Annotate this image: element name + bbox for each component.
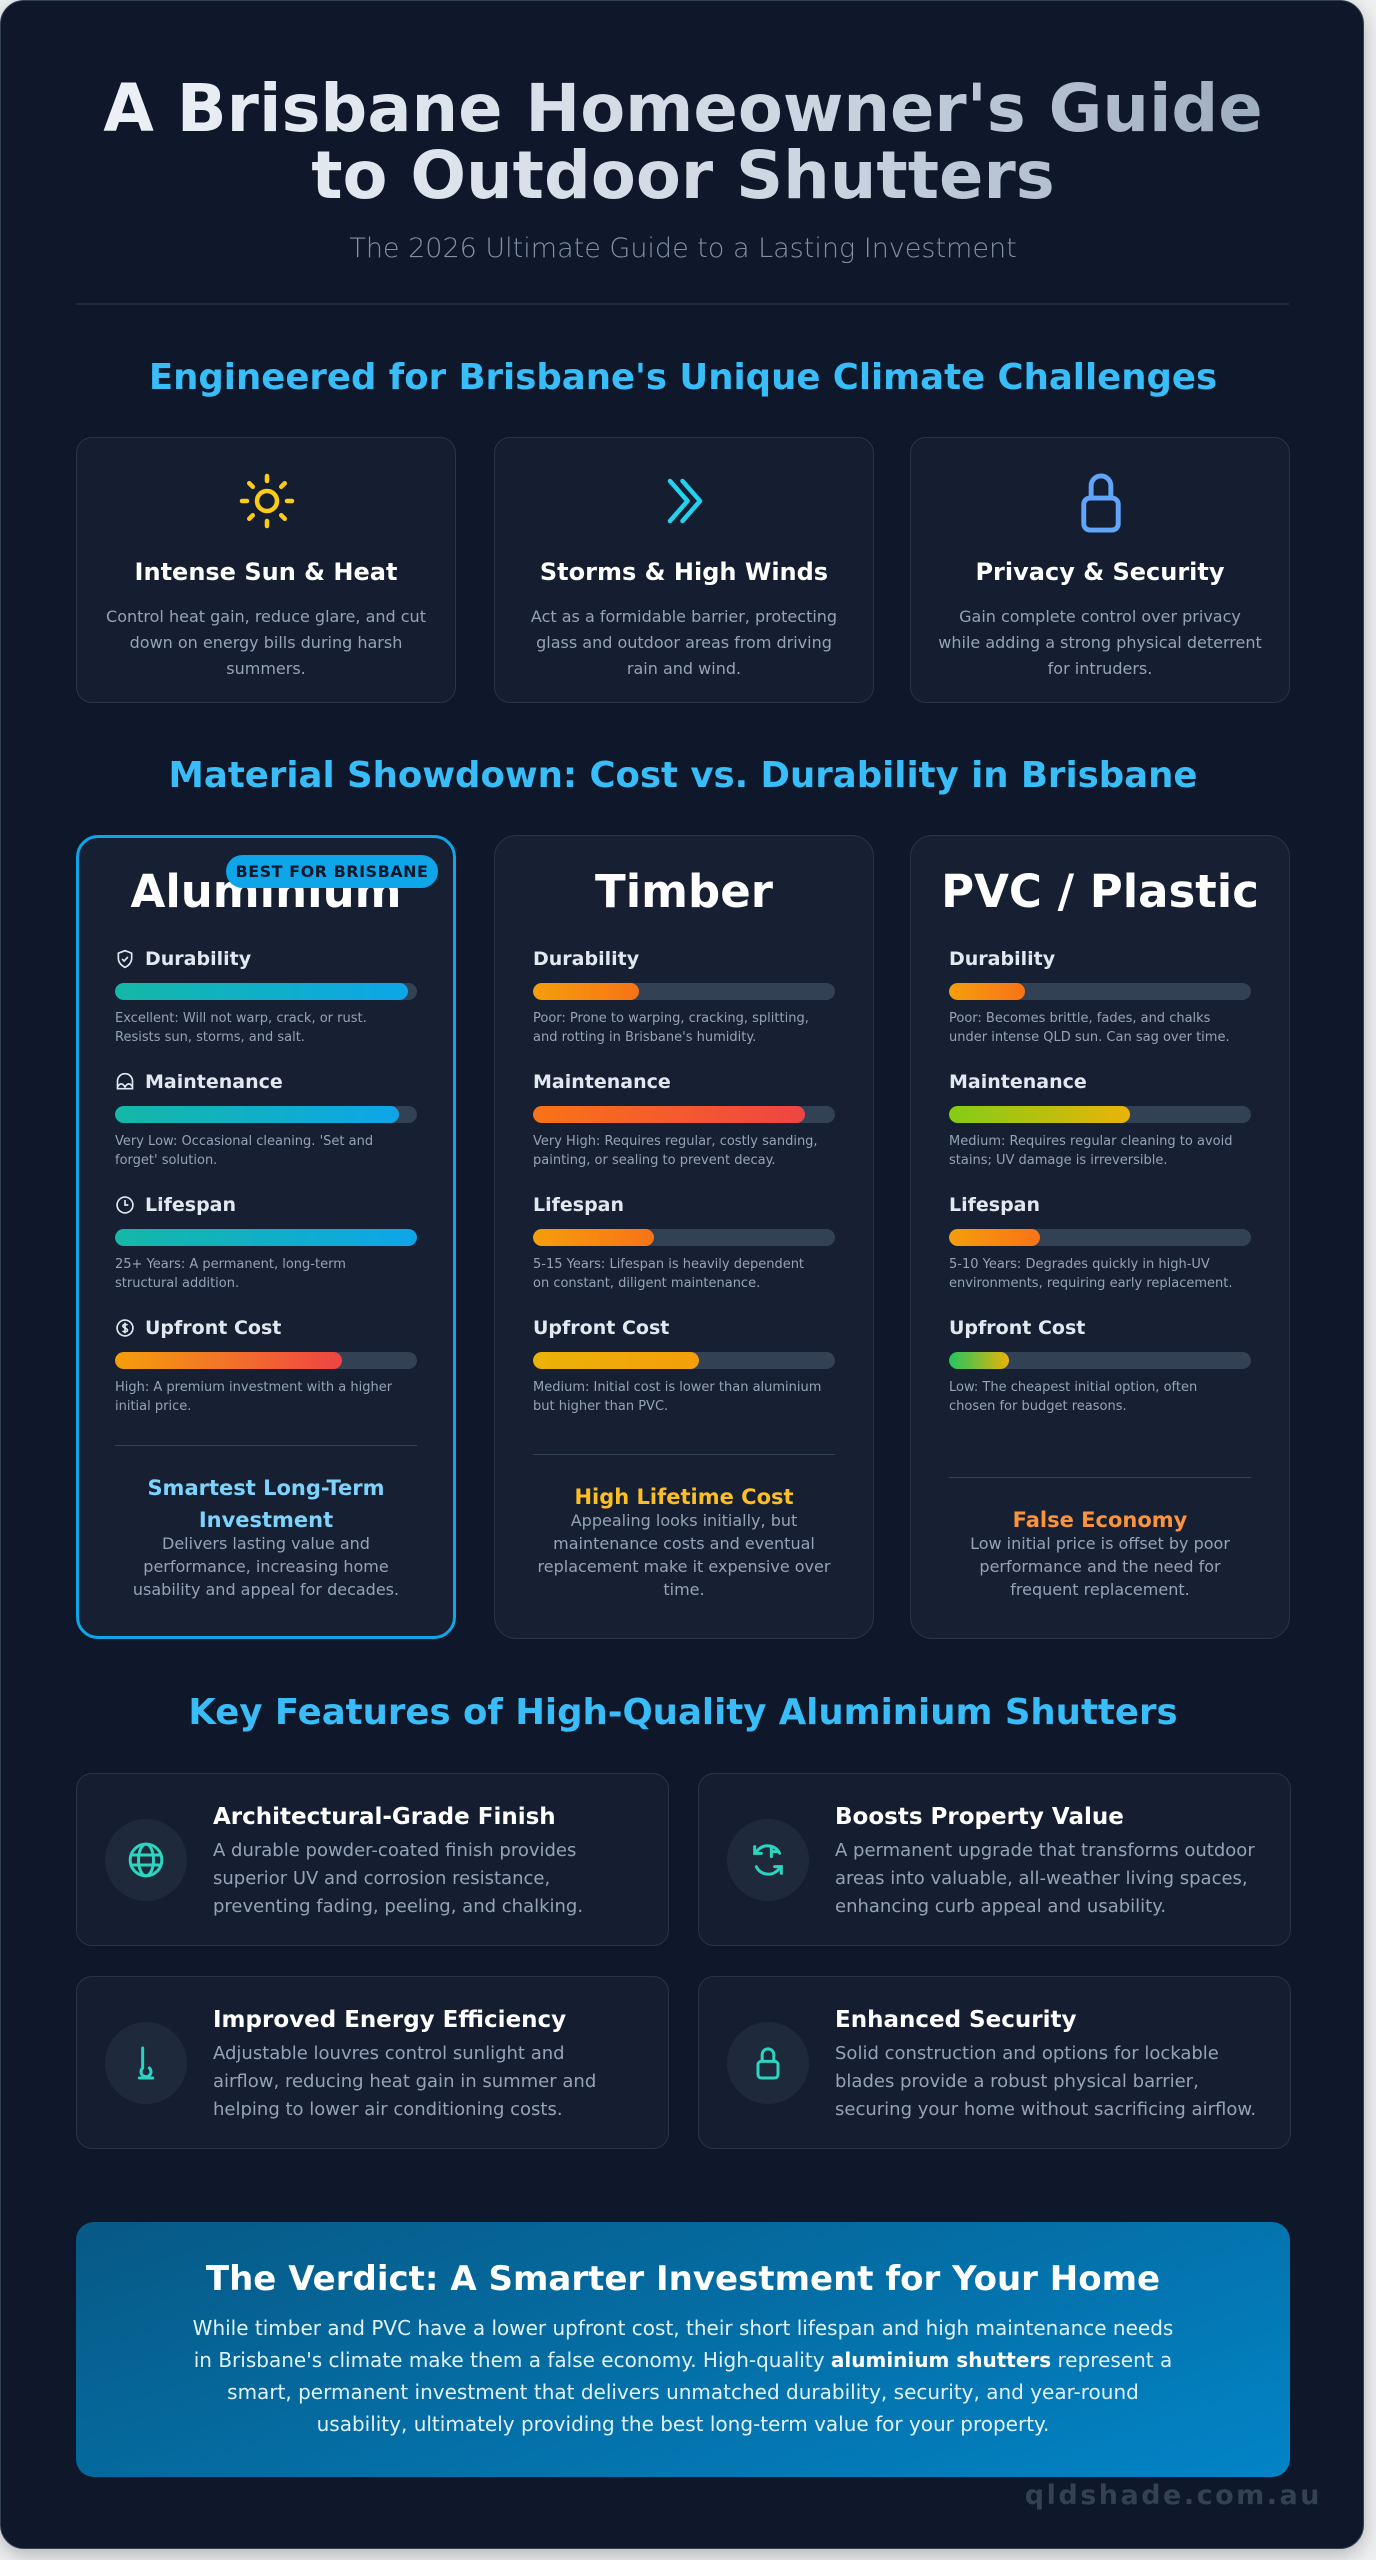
icon: lock	[1081, 474, 1121, 532]
feature: property value	[698, 1773, 1291, 1946]
metric: lifespan: environments, requiring early replacement.	[949, 1276, 1232, 1291]
panel: storms: Act as a formidable barrier, protecting	[531, 607, 837, 626]
verdict: timber: maintenance costs and eventual	[553, 1534, 815, 1553]
metric: durability	[949, 948, 1251, 1045]
metric: maintenance: forget' solution.	[115, 1153, 217, 1168]
subtitle: The 2026 Ultimate Guide to a Lasting Investment	[349, 233, 1017, 264]
panel: sun & heat: summers.	[226, 659, 306, 678]
feature: energy efficiency: Improved Energy Efficiency	[213, 2007, 566, 2033]
panel: sun & heat: down on energy bills during harsh	[130, 633, 402, 652]
feature: security: Enhanced Security	[835, 2007, 1076, 2033]
metric: upfront cost: Upfront Cost	[533, 1317, 669, 1339]
panel: storms: Storms & High Winds	[540, 558, 828, 586]
icon: refresh	[727, 1819, 809, 1901]
metric: maintenance	[533, 1071, 835, 1168]
metric: upfront cost: initial price.	[115, 1399, 191, 1414]
verdict: aluminium: usability and appeal for decades.	[133, 1580, 399, 1599]
metric: lifespan: Lifespan	[949, 1194, 1040, 1216]
panel: aluminium	[76, 835, 456, 1639]
feature: finish: preventing fading, peeling, and chalking.	[213, 1896, 583, 1917]
metric: maintenance: Very Low: Occasional cleaning. 'Set and	[115, 1134, 373, 1149]
heading: climate challenges: Engineered for Brisbane's Unique Climate Challenges	[149, 357, 1217, 398]
metric: upfront cost: chosen for budget reasons.	[949, 1399, 1127, 1414]
panel: timber	[494, 835, 874, 1639]
icon: globe	[105, 1819, 187, 1901]
metric: lifespan: structural addition.	[115, 1276, 239, 1291]
metric: lifespan: on constant, diligent maintenance.	[533, 1276, 760, 1291]
metric: maintenance: Maintenance	[949, 1071, 1087, 1093]
metric: maintenance	[115, 1071, 417, 1168]
metric: lifespan: Lifespan	[533, 1194, 624, 1216]
verdict: timber: replacement make it expensive over	[538, 1557, 830, 1576]
metric: durability	[533, 948, 835, 1045]
verdict text	[193, 2316, 1173, 2436]
metric: maintenance: painting, or sealing to prevent decay.	[533, 1153, 776, 1168]
panel: privacy: Gain complete control over privacy	[959, 607, 1241, 626]
panel: pvc	[910, 835, 1290, 1639]
verdict: aluminium: performance, increasing home	[143, 1557, 389, 1576]
feature: property value: Boosts Property Value	[835, 1804, 1124, 1830]
metric: maintenance: Maintenance	[145, 1071, 283, 1093]
metric: durability: Durability	[145, 948, 251, 970]
verdict text: While timber and PVC have a lower upfront cost, their short lifespan and high maintenance needs	[193, 2316, 1173, 2340]
panel: sun & heat: Control heat gain, reduce glare, and cut	[106, 607, 426, 626]
verdict box	[76, 2222, 1290, 2477]
metric: durability: Excellent: Will not warp, crack, or rust.	[115, 1011, 367, 1026]
metric: upfront cost	[115, 1317, 417, 1414]
metric: durability: under intense QLD sun. Can sag over time.	[949, 1030, 1230, 1045]
metric: durability: Durability	[533, 948, 639, 970]
title	[1, 76, 1365, 210]
metric: lifespan	[115, 1194, 417, 1291]
panel: aluminium: Aluminium	[130, 865, 402, 918]
metric: upfront cost: Upfront Cost	[949, 1317, 1085, 1339]
feature: energy efficiency: Adjustable louvres control sunlight and	[213, 2043, 565, 2064]
metric: lifespan: 25+ Years: A permanent, long-term	[115, 1257, 346, 1272]
metric: durability: and rotting in Brisbane's humidity.	[533, 1030, 756, 1045]
heading: key features: Key Features of High-Quality Aluminium Shutters	[188, 1692, 1178, 1733]
metric: maintenance	[949, 1071, 1251, 1168]
metric: durability: Durability	[949, 948, 1055, 970]
verdict: pvc: frequent replacement.	[1010, 1580, 1190, 1599]
badge	[226, 855, 438, 888]
feature: property value: A permanent upgrade that transforms outdoor	[835, 1840, 1255, 1861]
panel: privacy: for intruders.	[1048, 659, 1152, 678]
feature: finish	[76, 1773, 669, 1946]
feature: energy efficiency: helping to lower air conditioning costs.	[213, 2099, 563, 2120]
metric: upfront cost: Low: The cheapest initial option, often	[949, 1380, 1197, 1395]
panel: privacy: while adding a strong physical deterrent	[938, 633, 1262, 652]
icon: sun	[240, 474, 294, 528]
feature: finish: superior UV and corrosion resistance,	[213, 1868, 550, 1889]
verdict: pvc: Low initial price is offset by poor	[970, 1534, 1230, 1553]
verdict: timber: High Lifetime Cost	[574, 1485, 794, 1509]
title: to Outdoor Shutters	[311, 138, 1055, 214]
icon: chevrons	[668, 478, 702, 524]
panel: storms: glass and outdoor areas from driving	[536, 633, 832, 652]
verdict: pvc	[949, 1477, 1251, 1601]
metric: lifespan	[533, 1194, 835, 1291]
metric: lifespan: 5-15 Years: Lifespan is heavily dependent	[533, 1257, 804, 1272]
feature: energy efficiency	[76, 1976, 669, 2149]
metric: durability: Resists sun, storms, and salt.	[115, 1030, 305, 1045]
metric: upfront cost	[949, 1317, 1251, 1414]
watermark: qldshade.com.au	[1025, 2480, 1322, 2511]
icon: lock	[727, 2022, 809, 2104]
panel: sun & heat: Intense Sun & Heat	[135, 558, 397, 586]
panel: pvc: PVC / Plastic	[941, 865, 1259, 918]
feature: security: Solid construction and options for lockable	[835, 2043, 1219, 2064]
metric: maintenance: Maintenance	[533, 1071, 671, 1093]
metric: upfront cost: High: A premium investment with a higher	[115, 1380, 392, 1395]
feature: property value: areas into valuable, all-weather living spaces,	[835, 1868, 1248, 1889]
metric: maintenance: stains; UV damage is irreversible.	[949, 1153, 1167, 1168]
panel: storms	[494, 437, 874, 703]
feature: energy efficiency: airflow, reducing heat gain in summer and	[213, 2071, 596, 2092]
metric: durability	[115, 948, 417, 1045]
panel: timber: Timber	[595, 865, 773, 918]
metric: lifespan: 5-10 Years: Degrades quickly in high-UV	[949, 1257, 1210, 1272]
metric: lifespan: Lifespan	[145, 1194, 236, 1216]
verdict: aluminium: Smartest Long-Term	[147, 1476, 385, 1500]
metric: upfront cost: Medium: Initial cost is lower than aluminium	[533, 1380, 821, 1395]
panel: sun & heat	[76, 437, 456, 703]
verdict: timber: Appealing looks initially, but	[571, 1511, 797, 1530]
feature: finish: Architectural-Grade Finish	[213, 1804, 556, 1830]
badge: BEST FOR BRISBANE	[236, 862, 428, 881]
panel: privacy	[910, 437, 1290, 703]
metric: durability: Poor: Prone to warping, cracking, splitting,	[533, 1011, 809, 1026]
icon: thermometer	[105, 2022, 187, 2104]
metric: upfront cost	[533, 1317, 835, 1414]
verdict: aluminium	[115, 1445, 417, 1601]
verdict: pvc: False Economy	[1013, 1508, 1187, 1532]
metric: maintenance: Very High: Requires regular, costly sanding,	[533, 1134, 818, 1149]
metric: upfront cost: but higher than PVC.	[533, 1399, 668, 1414]
feature: property value: enhancing curb appeal and usability.	[835, 1896, 1166, 1917]
verdict title: The Verdict: A Smarter Investment for Your Home	[206, 2259, 1160, 2299]
metric: lifespan	[949, 1194, 1251, 1291]
verdict: timber	[533, 1454, 835, 1601]
verdict: aluminium: Delivers lasting value and	[162, 1534, 370, 1553]
feature: security	[698, 1976, 1291, 2149]
metric: maintenance: Medium: Requires regular cleaning to avoid	[949, 1134, 1232, 1149]
verdict: pvc: performance and the need for	[979, 1557, 1221, 1576]
metric: durability: Poor: Becomes brittle, fades, and chalks	[949, 1011, 1210, 1026]
feature: finish: A durable powder-coated finish provides	[213, 1840, 576, 1861]
verdict text: usability, ultimately providing the best long-term value for your property.	[317, 2412, 1049, 2436]
panel: privacy: Privacy & Security	[975, 558, 1225, 586]
verdict text: in Brisbane's climate make them a false economy. High-quality aluminium shutters represent a	[194, 2348, 1172, 2372]
heading: material showdown: Material Showdown: Cost vs. Durability in Brisbane	[169, 755, 1197, 796]
verdict text: smart, permanent investment that delivers unmatched durability, security, and year-round	[227, 2380, 1139, 2404]
feature: security: securing your home without sacrificing airflow.	[835, 2099, 1256, 2120]
feature: security: blades provide a robust physical barrier,	[835, 2071, 1199, 2092]
verdict: aluminium: Investment	[199, 1508, 333, 1532]
title: A Brisbane Homeowner's Guide	[103, 71, 1263, 147]
metric: upfront cost: Upfront Cost	[145, 1317, 281, 1339]
panel: storms: rain and wind.	[627, 659, 741, 678]
verdict: timber: time.	[663, 1580, 705, 1599]
